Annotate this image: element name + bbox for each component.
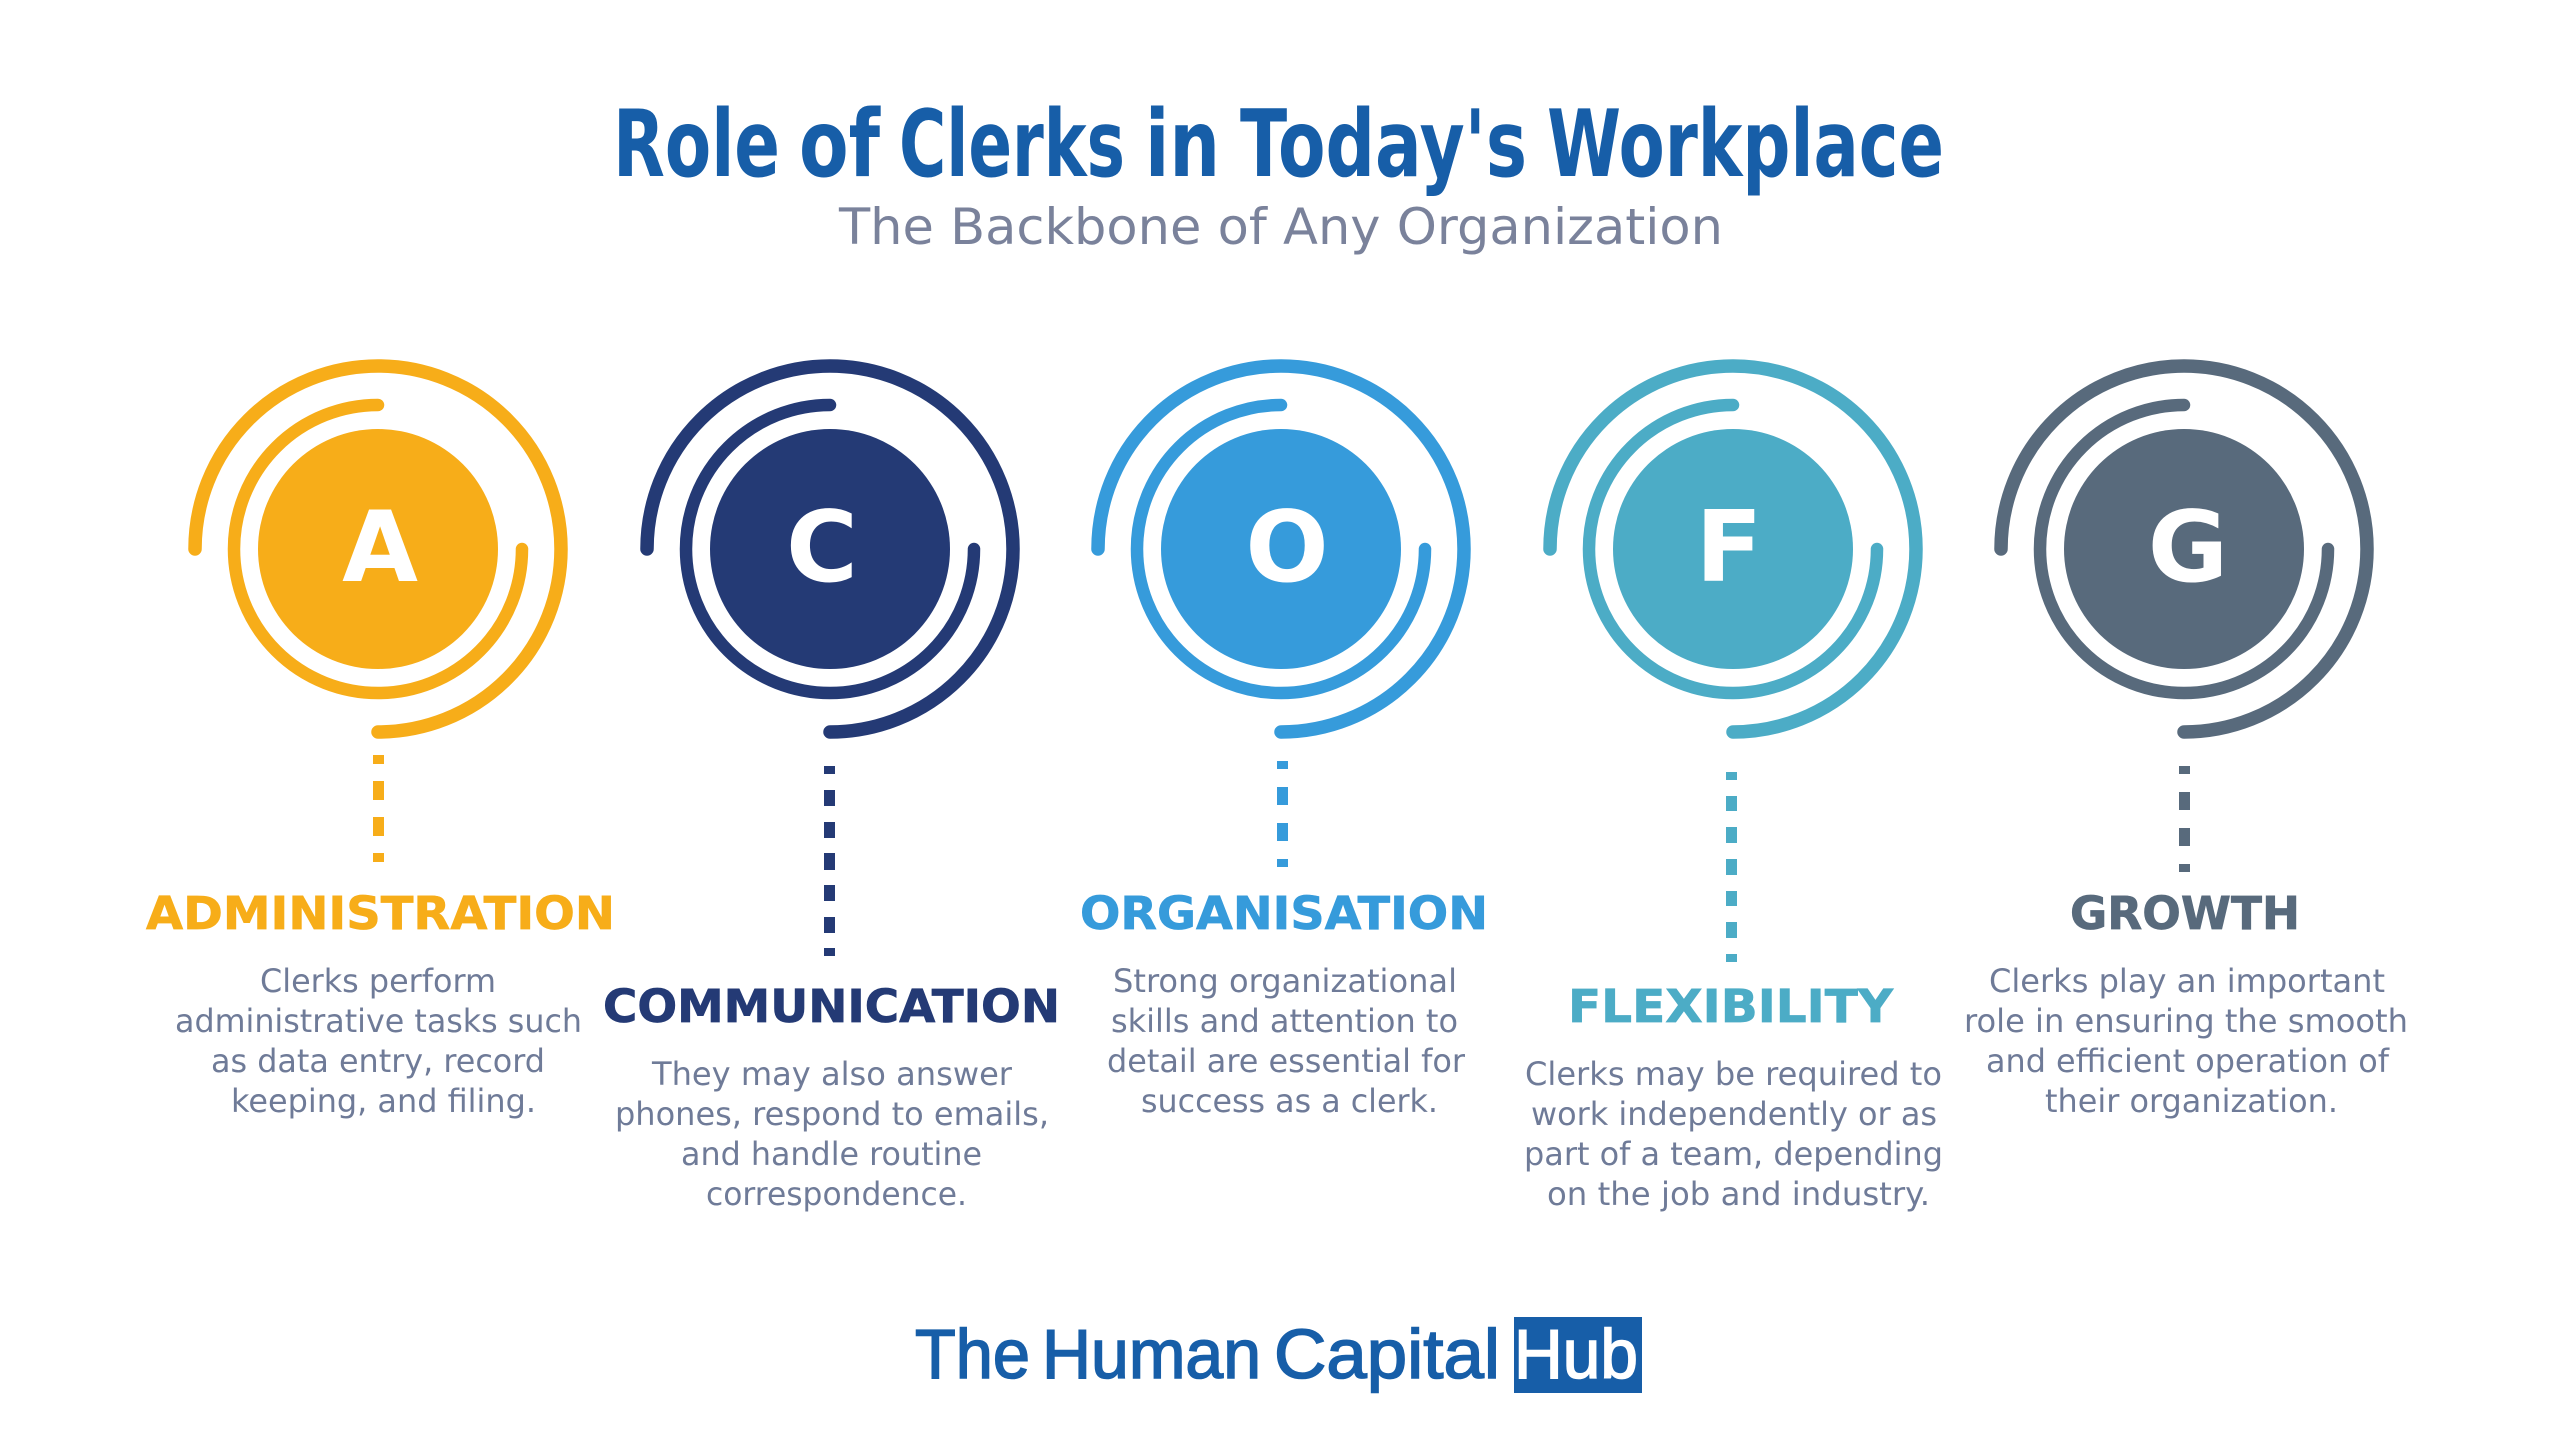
title: in (1145, 90, 1220, 198)
logo: The (915, 1315, 1030, 1393)
title (613, 90, 1944, 198)
icon: F spiral badge: F (1696, 491, 1762, 605)
icon: G spiral badge: G (2148, 491, 2228, 605)
text: flexibility: part of a team, depending (1524, 1135, 1943, 1173)
icon: A spiral badge: A (342, 491, 418, 605)
panel: communication (603, 366, 1060, 1213)
connector: communication (824, 766, 835, 956)
icon: A spiral badge (195, 366, 561, 732)
panel: growth (1964, 366, 2408, 1120)
connector: growth (2179, 766, 2190, 872)
text: administration (175, 962, 582, 1120)
logo (915, 1315, 1642, 1393)
text: growth: Clerks play an important (1989, 962, 2385, 1000)
connector: administration (373, 755, 384, 862)
text: administration: as data entry, record (211, 1042, 545, 1080)
subtitle: The Backbone of Any Organization (838, 198, 1723, 256)
connector: flexibility (1726, 772, 1737, 962)
text: flexibility (1524, 1055, 1943, 1213)
title: of (799, 90, 881, 198)
title: Role (613, 90, 780, 198)
text: growth: role in ensuring the smooth (1964, 1002, 2408, 1040)
icon: O spiral badge (1098, 366, 1464, 732)
heading: organisation: ORGANISATION (1080, 887, 1488, 940)
text: flexibility: Clerks may be required to (1525, 1055, 1942, 1093)
text: organisation: skills and attention to (1111, 1002, 1458, 1040)
text: organisation: Strong organizational (1113, 962, 1457, 1000)
logo: Hub (1514, 1315, 1638, 1393)
text: flexibility: work independently or as (1531, 1095, 1937, 1133)
logo: Capital (1274, 1315, 1500, 1393)
text: organisation (1107, 962, 1466, 1120)
text: organisation: success as a clerk. (1141, 1082, 1438, 1120)
logo: Human (1042, 1315, 1261, 1393)
text: flexibility: on the job and industry. (1547, 1175, 1930, 1213)
text: growth (1964, 962, 2408, 1120)
text: communication: phones, respond to emails, (615, 1095, 1049, 1133)
panel: flexibility (1524, 366, 1943, 1213)
heading: communication: COMMUNICATION (603, 980, 1060, 1033)
text: communication (615, 1055, 1049, 1213)
icon: C spiral badge: C (786, 491, 858, 605)
text: organisation: detail are essential for (1107, 1042, 1466, 1080)
panel: organisation (1080, 366, 1488, 1120)
text: communication: correspondence. (706, 1175, 967, 1213)
connector: organisation (1277, 761, 1288, 867)
title: Clerks (899, 90, 1125, 198)
text: communication: They may also answer (651, 1055, 1013, 1093)
text: growth: and efficient operation of (1986, 1042, 2390, 1080)
text: administration: administrative tasks such (175, 1002, 582, 1040)
title: Today's (1240, 90, 1527, 198)
heading: administration: ADMINISTRATION (146, 887, 615, 940)
heading: flexibility: FLEXIBILITY (1568, 980, 1895, 1033)
text: administration: Clerks perform (260, 962, 496, 1000)
icon: G spiral badge (2001, 366, 2367, 732)
text: administration: keeping, and filing. (231, 1082, 536, 1120)
icon: C spiral badge (647, 366, 1013, 732)
text: growth: their organization. (2045, 1082, 2338, 1120)
text: communication: and handle routine (681, 1135, 982, 1173)
panel: administration (146, 366, 615, 1120)
title: Workplace (1547, 90, 1944, 198)
heading: growth: GROWTH (2070, 887, 2300, 940)
icon: F spiral badge (1550, 366, 1916, 732)
icon: O spiral badge: O (1245, 491, 1329, 605)
